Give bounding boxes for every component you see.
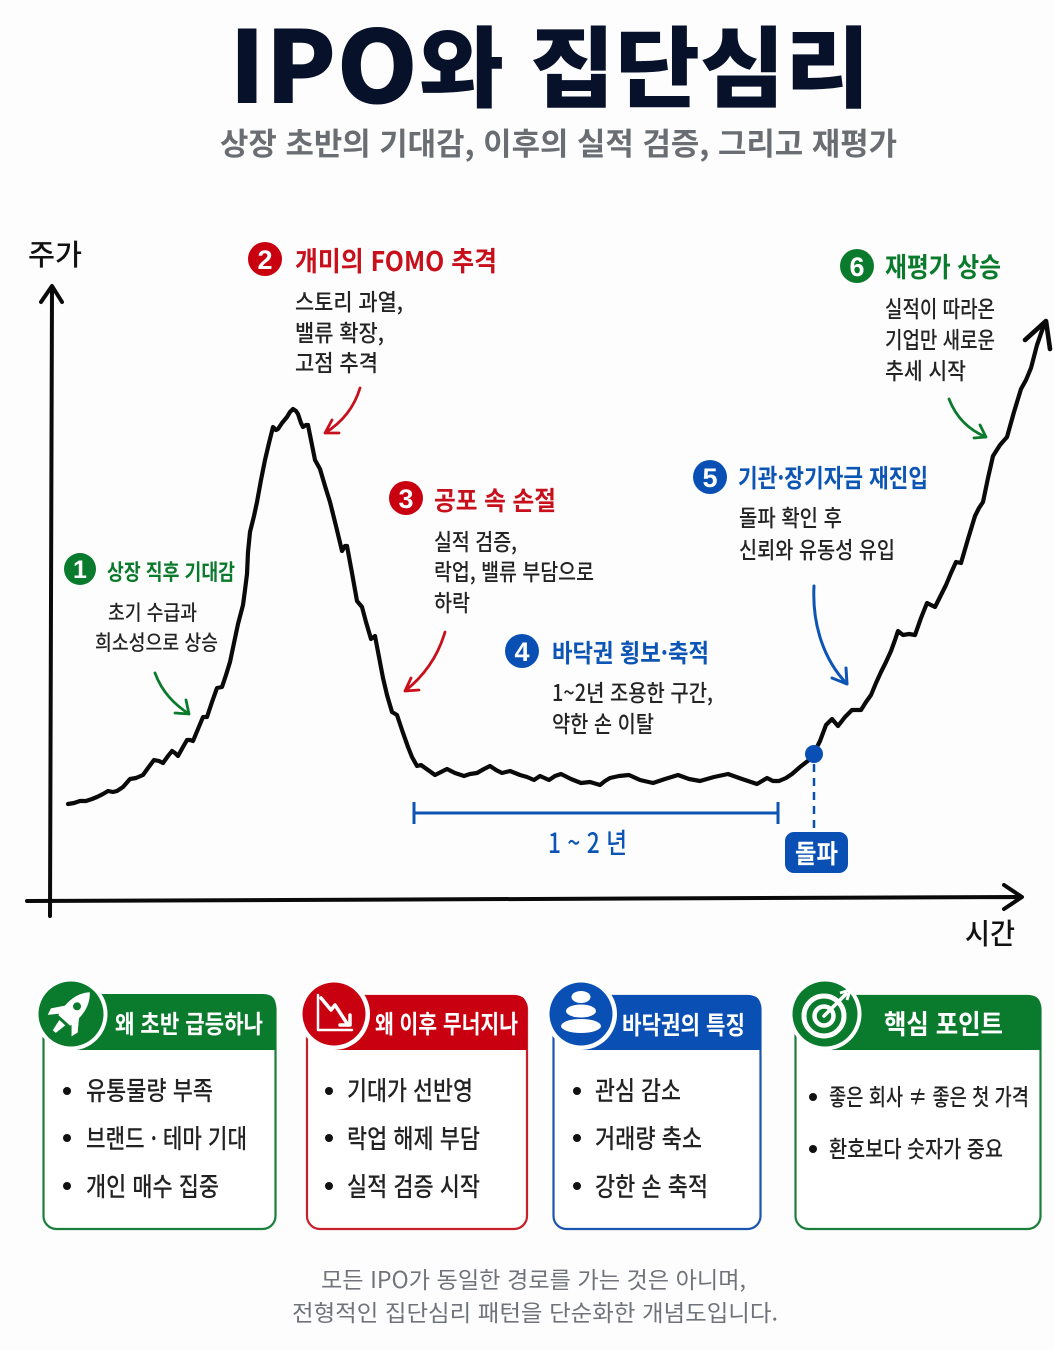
panel: why later decline: 왜 이후 무너지나 xyxy=(375,1005,518,1041)
callout 3: 3 xyxy=(398,484,414,514)
panel: why early surge: 왜 초반 급등하나 xyxy=(115,1005,263,1041)
callout 6: 실적이 따라온 xyxy=(885,290,995,324)
callout 5: 신뢰와 유동성 유입 xyxy=(739,531,895,565)
callout 1: 상장 직후 기대감 xyxy=(107,555,235,587)
bullet list: 개인 매수 집중 xyxy=(86,1167,219,1204)
callout 5: 5 xyxy=(702,463,718,493)
bullet list: 거래량 축소 xyxy=(595,1119,702,1156)
title: 와 집단심리 xyxy=(419,0,870,126)
callout 3: 실적 검증, xyxy=(434,523,517,557)
y axis with label xyxy=(28,232,82,916)
bullet list: 실적 검증 시작 xyxy=(347,1167,480,1204)
chart: IPO price curve xyxy=(27,232,1050,953)
callout 1 xyxy=(64,553,235,714)
x axis with label xyxy=(27,885,1022,953)
callout 1: 초기 수급과 xyxy=(108,597,197,627)
callout 5: 돌파 확인 후 xyxy=(739,499,842,533)
callout 1: 1 xyxy=(73,556,87,584)
callout 4: 1~2년 조용한 구간, xyxy=(552,674,713,708)
bullet list xyxy=(325,1071,480,1204)
bullet list: 유통물량 부족 xyxy=(86,1071,213,1108)
callout 2: 스토리 과열, xyxy=(295,283,403,317)
callout 3: 하락 xyxy=(434,584,470,618)
bullet list: 락업 해제 부담 xyxy=(347,1119,480,1156)
bullet list: 관심 감소 xyxy=(595,1071,681,1108)
panel: key points: 핵심 포인트 xyxy=(884,1003,1003,1042)
bullet list: 강한 손 축적 xyxy=(595,1167,708,1204)
panel: bottom traits xyxy=(545,978,761,1229)
callout 5 xyxy=(693,459,928,684)
bullet list: 기대가 선반영 xyxy=(347,1071,473,1108)
breakout marker: 돌파 xyxy=(795,834,838,871)
callout 6 xyxy=(840,246,1001,438)
bullet list xyxy=(809,1078,1029,1164)
callout 3 xyxy=(389,481,594,691)
bullet list xyxy=(573,1071,708,1204)
callout 6: 추세 시작 xyxy=(885,352,966,386)
footnote xyxy=(292,1261,778,1328)
icon: falling chart xyxy=(318,995,352,1030)
callout 2: 개미의 FOMO 추격 xyxy=(295,240,497,279)
panel: why later decline xyxy=(298,978,527,1229)
callout 4: 4 xyxy=(514,637,530,667)
callout 6: 6 xyxy=(849,252,865,282)
footnote: 모든 IPO가 동일한 경로를 가는 것은 아니며, xyxy=(321,1261,746,1295)
bullet list: 환호보다 숫자가 중요 xyxy=(829,1130,1003,1164)
icon: rocket xyxy=(41,980,103,1044)
icon: stacked stones xyxy=(561,991,601,1033)
callout 2: 밸류 확장, xyxy=(295,314,384,348)
panel: key points xyxy=(788,978,1041,1229)
price line arrowhead xyxy=(1025,321,1050,349)
callout 1: 희소성으로 상승 xyxy=(95,627,218,657)
callout 5: 기관·장기자금 재진입 xyxy=(738,459,928,495)
callout 2: 고점 추격 xyxy=(295,344,378,378)
panel: bottom traits: 바닥권의 특징 xyxy=(622,1006,745,1042)
bullet list: 브랜드 · 테마 기대 xyxy=(86,1119,247,1156)
panel: why early surge xyxy=(34,978,276,1229)
callout 4: 바닥권 횡보·축적 xyxy=(552,634,709,670)
x axis with label: 시간 xyxy=(965,911,1015,953)
bracket: 1~2 years: 1 ~ 2 년 xyxy=(548,822,627,862)
bracket: 1~2 years xyxy=(414,802,778,862)
callout 4: 약한 손 이탈 xyxy=(552,705,654,739)
callout 2: 2 xyxy=(257,245,273,275)
subtitle: 상장 초반의 기대감, 이후의 실적 검증, 그리고 재평가 xyxy=(220,119,897,164)
price line xyxy=(68,322,1045,804)
callout 6: 기업만 새로운 xyxy=(885,321,995,355)
footnote: 전형적인 집단심리 패턴을 단순화한 개념도입니다. xyxy=(292,1294,778,1328)
icon: target xyxy=(804,990,850,1036)
callout 3: 공포 속 손절 xyxy=(434,481,556,518)
breakout marker xyxy=(785,745,848,873)
bullet list xyxy=(63,1071,247,1204)
callout 6: 재평가 상승 xyxy=(885,246,1001,285)
callout 2 xyxy=(248,240,497,433)
title xyxy=(229,0,870,132)
callout 4 xyxy=(505,634,713,739)
callout 3: 락업, 밸류 부담으로 xyxy=(434,553,594,587)
y axis with label: 주가 xyxy=(28,232,82,274)
